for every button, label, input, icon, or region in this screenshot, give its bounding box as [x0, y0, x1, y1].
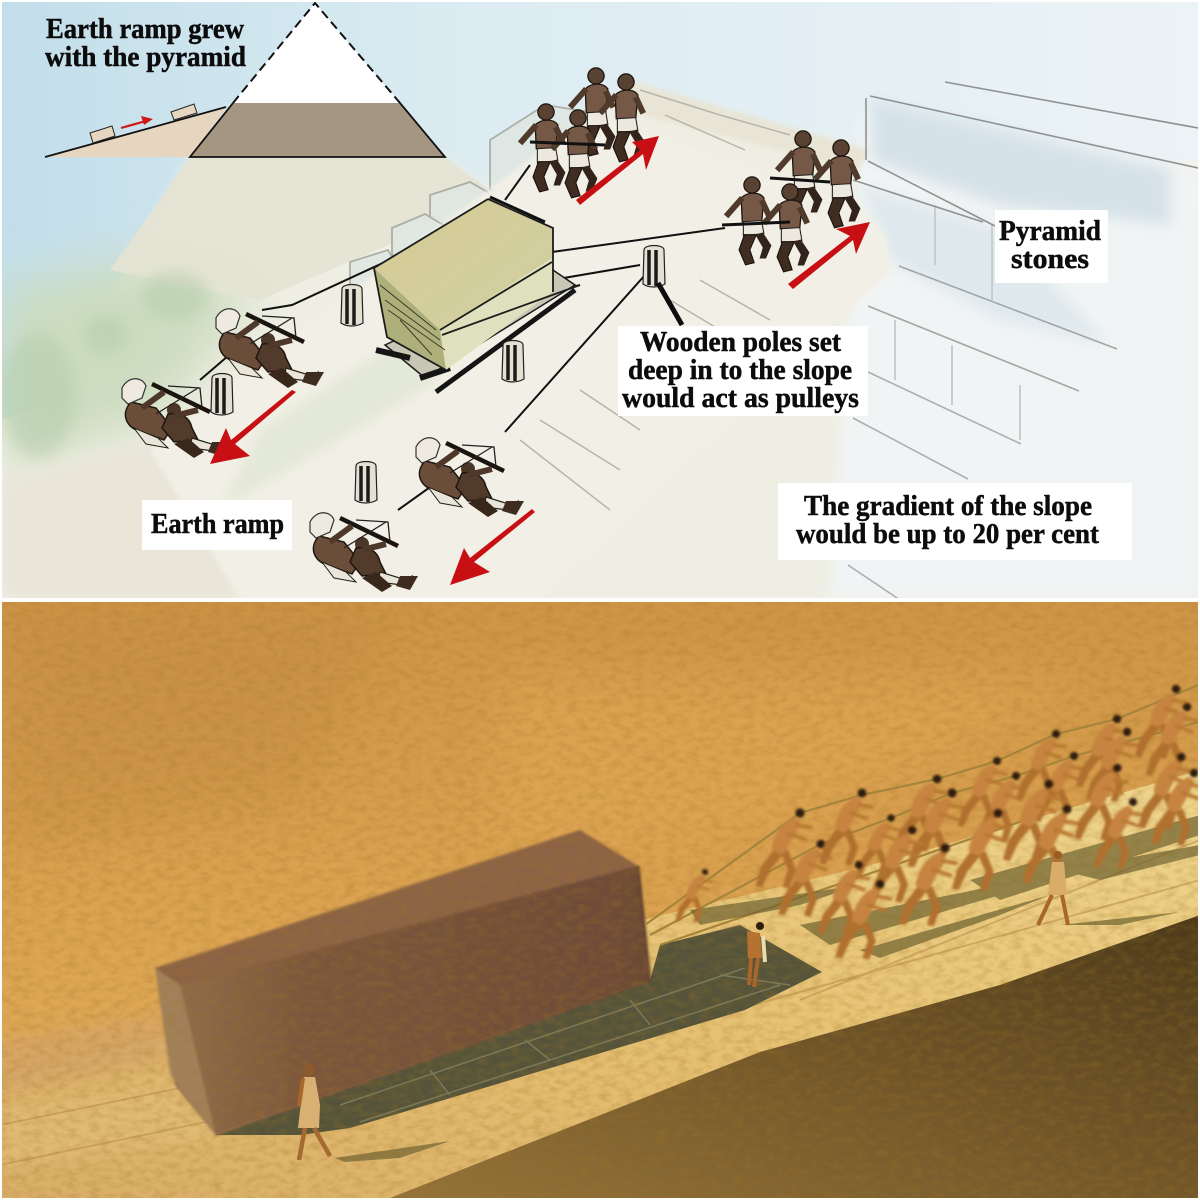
label: pyramid stones: Pyramid: [999, 215, 1101, 247]
label: wooden poles: Wooden poles set: [640, 326, 841, 358]
heading second line: with the pyramid: [45, 41, 246, 73]
shadows of workers: [335, 815, 1200, 1162]
sledge shadow: [215, 925, 822, 1135]
panel: photo of block hauled up the ramp: [0, 600, 1200, 1200]
ramp surface: [150, 115, 892, 600]
ropes: [645, 685, 1198, 945]
heading: earth ramp grew with the pyramid: Earth ramp grew: [46, 13, 244, 45]
worker by the sledge: [747, 922, 765, 987]
overseer near block: [298, 1064, 330, 1160]
stone block: [374, 197, 580, 370]
workers crowd: [675, 685, 1200, 960]
inset: pyramid diagram: [45, 3, 445, 157]
pole: wooden pulleys: [211, 246, 665, 503]
label: gradient of the slope: [778, 483, 1132, 560]
label: earth ramp: [142, 500, 292, 550]
label: wooden poles: [618, 326, 868, 416]
sledge: [376, 268, 575, 392]
stone block: [155, 830, 650, 1136]
icon: workers pulling up-right: [520, 68, 860, 272]
overseer right: [1038, 851, 1068, 925]
label: earth ramp: Earth ramp: [151, 509, 284, 540]
label: wooden poles: would act as pulleys: [622, 382, 859, 414]
arrows: pull direction: [210, 136, 870, 585]
shaded slope: [385, 915, 1200, 1200]
panel: ramp illustration: [0, 0, 1200, 600]
pyramid stone courses: [848, 82, 1198, 600]
ropes: [200, 165, 725, 510]
icon: workers pulling down-left: [122, 309, 524, 592]
black leader line: [658, 283, 682, 325]
label: wooden poles: deep in to the slope: [628, 354, 852, 386]
label: pyramid stones: stones: [1011, 243, 1089, 275]
label: pyramid stones: [995, 210, 1108, 283]
label: gradient of the slope: The gradient of the slope: [804, 490, 1092, 522]
ramp steps on left: [349, 105, 586, 285]
ramp stair lines: [520, 90, 790, 510]
ramp surface: [0, 770, 1200, 1200]
palm trees: [0, 271, 209, 457]
label: gradient of the slope: would be up to 20 per cent: [796, 518, 1099, 550]
